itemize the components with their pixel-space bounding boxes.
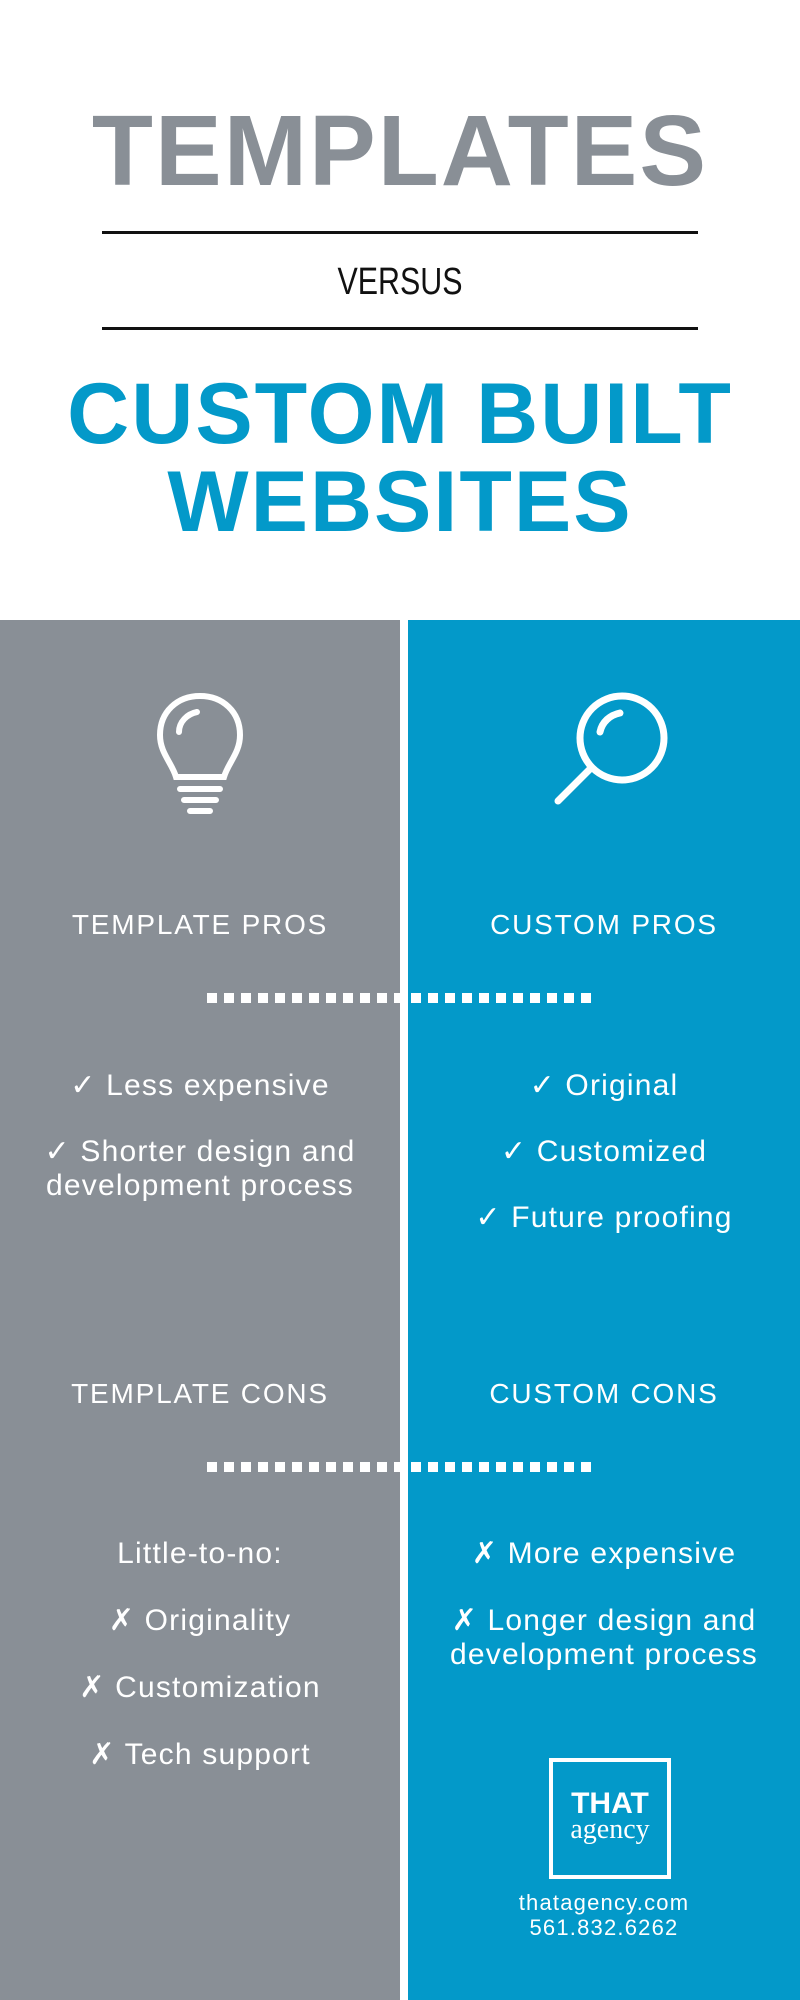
contact: thatagency.com [519,1890,689,1915]
list: custom cons: ✗ More expensive [472,1537,736,1570]
list: custom pros: ✓ Future proofing [475,1201,733,1234]
heading: custom cons: CUSTOM CONS [489,1378,719,1409]
title: custom built websites [67,366,733,550]
heading: custom pros: CUSTOM PROS [490,909,718,940]
heading: template cons: TEMPLATE CONS [71,1378,329,1409]
panel: templates [0,620,400,2000]
logo: agency [570,1814,650,1845]
list: template pros: ✓ Shorter design and [44,1135,355,1168]
icon: magnifier [554,692,668,804]
panel: custom [408,620,800,2000]
list: template pros: development process [46,1169,354,1202]
list: template pros [44,1069,355,1202]
list: custom pros: ✓ Customized [501,1135,707,1168]
list: template cons: ✗ Originality [109,1604,291,1637]
list: template cons: ✗ Customization [79,1671,321,1704]
list: custom pros [475,1069,733,1234]
logo [549,1758,671,1879]
title: custom built websites: CUSTOM BUILT [67,366,733,462]
list: template cons: Little-to-no: [117,1537,283,1570]
contact [519,1890,689,1940]
list: custom pros: ✓ Original [530,1069,678,1102]
list: custom cons: development process [450,1638,758,1671]
logo: THAT [571,1787,649,1820]
icon: light bulb [157,693,243,814]
contact: 561.832.6262 [530,1915,678,1940]
title: templates: TEMPLATES [92,95,708,207]
heading: template pros: TEMPLATE PROS [72,909,328,940]
list: custom cons: ✗ Longer design and [452,1604,756,1637]
list: custom cons [450,1537,758,1671]
list: template cons [79,1537,321,1771]
list: template pros: ✓ Less expensive [70,1069,330,1102]
title: custom built websites: WEBSITES [167,454,633,550]
versus label: VERSUS [337,261,463,303]
list: template cons: ✗ Tech support [89,1738,311,1771]
